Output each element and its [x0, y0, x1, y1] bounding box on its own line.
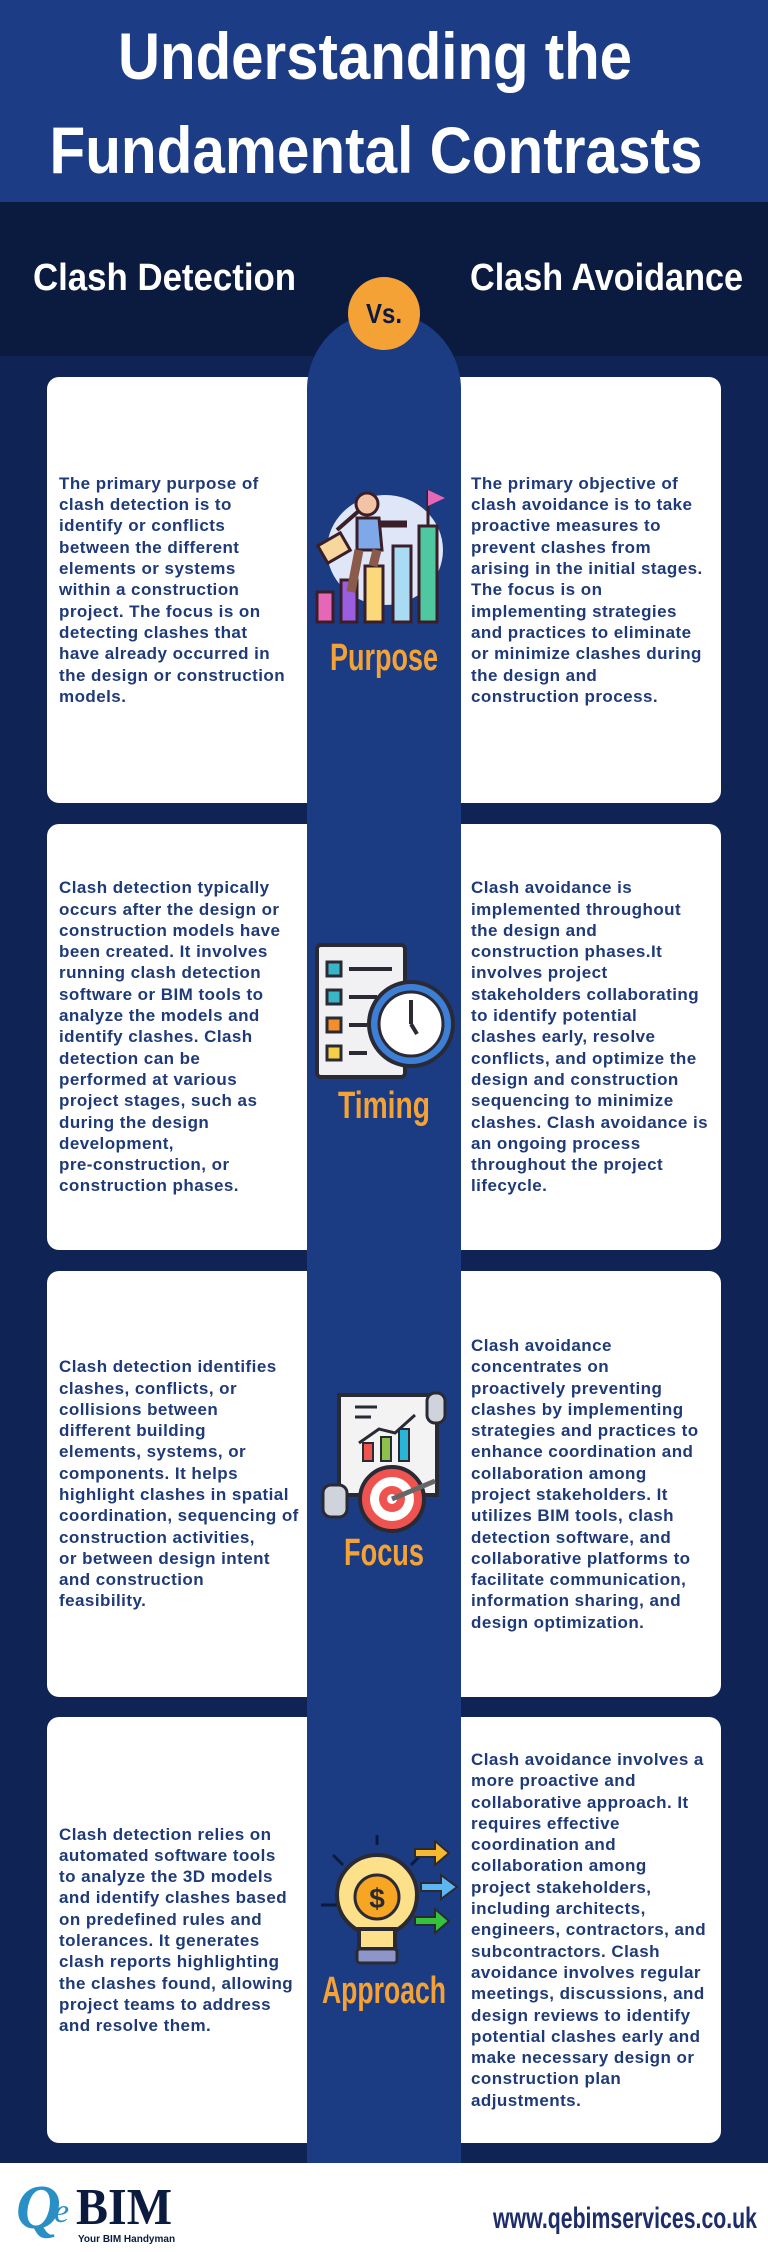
text: approach avoidance: more proactive and	[471, 1771, 636, 1790]
text: approach avoidance: engineers, contractors, and	[471, 1920, 706, 1939]
text: timing avoidance: an ongoing process	[471, 1134, 641, 1153]
vs badge: Vs.	[366, 298, 402, 328]
text: focus detection: construction activities,	[59, 1528, 255, 1547]
text: purpose avoidance: arising in the initial stages.	[471, 559, 703, 578]
text: purpose detection: the design or construction	[59, 666, 285, 685]
text: focus avoidance: strategies and practices to	[471, 1421, 699, 1440]
title	[50, 19, 702, 187]
text: focus avoidance: collaborative platforms to	[471, 1549, 691, 1568]
text: approach avoidance: avoidance involves regular	[471, 1963, 701, 1982]
icon: focus: Focus	[344, 1532, 424, 1574]
column headings	[33, 257, 743, 299]
text: focus detection: collisions between	[59, 1400, 218, 1419]
text: approach avoidance: Clash avoidance involves a	[471, 1750, 704, 1769]
text: purpose avoidance	[471, 474, 703, 706]
text: approach detection: Clash detection relies on	[59, 1825, 271, 1844]
text: purpose detection: identify or conflicts	[59, 516, 225, 535]
text: approach detection: clash reports highlighting	[59, 1952, 279, 1971]
text: focus detection: Clash detection identifies	[59, 1357, 277, 1376]
text: approach avoidance: collaboration among	[471, 1856, 647, 1875]
text: focus avoidance: information sharing, and	[471, 1591, 681, 1610]
text: timing detection: detection can be	[59, 1049, 200, 1068]
text: timing avoidance	[471, 878, 708, 1195]
text: focus detection: clashes, conflicts, or	[59, 1379, 237, 1398]
text: approach avoidance: construction plan	[471, 2069, 621, 2088]
text: timing avoidance: stakeholders collaborating	[471, 985, 699, 1004]
panel: purpose	[47, 377, 721, 803]
text: approach avoidance: coordination and	[471, 1835, 616, 1854]
text: focus avoidance: project stakeholders. It	[471, 1485, 668, 1504]
text: timing detection: analyze the models and	[59, 1006, 260, 1025]
text: purpose avoidance: prevent clashes from	[471, 538, 651, 557]
text: purpose detection: have already occurred in	[59, 644, 270, 663]
text: approach avoidance: including architects,	[471, 1899, 646, 1918]
text: timing detection: been created. It involves	[59, 942, 268, 961]
text: timing avoidance: the design and	[471, 921, 597, 940]
text: purpose avoidance: implementing strategies	[471, 602, 677, 621]
text: timing avoidance: lifecycle.	[471, 1176, 547, 1195]
text: timing detection: construction models have	[59, 921, 280, 940]
text: timing avoidance: conflicts, and optimize the	[471, 1049, 697, 1068]
text: timing avoidance: to identify potential	[471, 1006, 637, 1025]
title: Understanding the	[118, 19, 632, 93]
text: approach detection: and identify clashes based	[59, 1888, 287, 1907]
text: focus detection	[59, 1357, 299, 1610]
text: timing avoidance: sequencing to minimize	[471, 1091, 674, 1110]
text: timing detection: occurs after the design or	[59, 900, 279, 919]
text: focus avoidance: design optimization.	[471, 1613, 644, 1632]
text: purpose detection: models.	[59, 687, 126, 706]
text: timing avoidance: clashes early, resolve	[471, 1027, 655, 1046]
footer logo: Q	[16, 2174, 61, 2242]
text: purpose avoidance: proactive measures to	[471, 516, 661, 535]
text: approach avoidance: adjustments.	[471, 2091, 581, 2110]
text: purpose detection	[59, 474, 285, 706]
text: timing detection: pre-construction, or	[59, 1155, 230, 1174]
text: approach detection	[59, 1825, 293, 2035]
text: focus avoidance: detection software, and	[471, 1528, 671, 1547]
text: timing detection: project stages, such as	[59, 1091, 257, 1110]
text: purpose avoidance: construction process.	[471, 687, 658, 706]
text: approach avoidance: requires effective	[471, 1814, 620, 1833]
text: focus detection: or between design intent	[59, 1549, 270, 1568]
text: timing detection: Clash detection typically	[59, 878, 270, 897]
text: approach avoidance: make necessary design or	[471, 2048, 694, 2067]
text: focus detection: different building	[59, 1421, 206, 1440]
text: timing detection	[59, 878, 280, 1195]
text: purpose avoidance: clash avoidance is to take	[471, 495, 692, 514]
icon: purpose	[316, 490, 445, 679]
column headings: Clash Detection	[33, 257, 296, 299]
text: purpose detection: The primary purpose of	[59, 474, 259, 493]
text: purpose detection: between the different	[59, 538, 239, 557]
text: timing avoidance: involves project	[471, 963, 608, 982]
text: purpose avoidance: The primary objective of	[471, 474, 678, 493]
text: focus avoidance: facilitate communication,	[471, 1570, 686, 1589]
text: purpose detection: detecting clashes that	[59, 623, 247, 642]
text: timing detection: development,	[59, 1134, 174, 1153]
text: approach avoidance: design reviews to identify	[471, 2006, 691, 2025]
text: approach detection: to analyze the 3D models	[59, 1867, 273, 1886]
footer logo: BIM	[76, 2179, 172, 2236]
header band	[0, 202, 768, 356]
text: focus avoidance: collaboration among	[471, 1464, 647, 1483]
text: approach detection: on predefined rules and	[59, 1910, 262, 1929]
title band	[0, 0, 768, 202]
text: focus detection: components. It helps	[59, 1464, 238, 1483]
text: approach detection: tolerances. It generates	[59, 1931, 260, 1950]
text: focus detection: coordination, sequencing of	[59, 1506, 299, 1525]
icon: timing: Timing	[338, 1085, 430, 1127]
text: timing avoidance: throughout the project	[471, 1155, 663, 1174]
text: approach detection: project teams to address	[59, 1995, 271, 2014]
text: focus detection: highlight clashes in spatial	[59, 1485, 289, 1504]
footer logo: e	[54, 2193, 69, 2230]
text: approach detection: the clashes found, allowing	[59, 1974, 293, 1993]
text: approach avoidance: potential clashes early and	[471, 2027, 700, 2046]
text: approach avoidance: collaborative approach. It	[471, 1793, 689, 1812]
text: purpose avoidance: The focus is on	[471, 580, 602, 599]
text: focus detection: feasibility.	[59, 1591, 146, 1610]
text: timing avoidance: Clash avoidance is	[471, 878, 632, 897]
text: focus avoidance: concentrates on	[471, 1357, 609, 1376]
column headings: Clash Avoidance	[470, 257, 743, 299]
text: timing avoidance: implemented throughout	[471, 900, 681, 919]
text: approach avoidance: meetings, discussions, and	[471, 1984, 705, 2003]
text: approach detection: and resolve them.	[59, 2016, 211, 2035]
text: focus avoidance: enhance coordination and	[471, 1442, 693, 1461]
text: timing detection: software or BIM tools to	[59, 985, 263, 1004]
text: timing avoidance: construction phases.It	[471, 942, 662, 961]
text: approach avoidance: project stakeholders,	[471, 1878, 651, 1897]
text: timing detection: running clash detection	[59, 963, 261, 982]
footer logo	[16, 2174, 175, 2245]
text: focus avoidance: utilizes BIM tools, clash	[471, 1506, 674, 1525]
text: purpose avoidance: the design and	[471, 666, 597, 685]
text: timing detection: performed at various	[59, 1070, 237, 1089]
text: focus avoidance: Clash avoidance	[471, 1336, 612, 1355]
text: focus avoidance	[471, 1336, 699, 1632]
icon: approach	[321, 1835, 458, 2012]
icon: timing	[315, 943, 455, 1127]
text: timing detection: identify clashes. Clash	[59, 1027, 253, 1046]
text: focus detection: elements, systems, or	[59, 1442, 246, 1461]
center pillar	[307, 312, 461, 2163]
footer logo: Your BIM Handyman	[78, 2234, 175, 2245]
panel: timing	[47, 824, 721, 1250]
text: purpose avoidance: and practices to eliminate	[471, 623, 692, 642]
text: timing avoidance: design and construction	[471, 1070, 679, 1089]
panel: approach	[47, 1717, 721, 2143]
text: approach avoidance	[471, 1750, 706, 2110]
text: purpose detection: clash detection is to	[59, 495, 232, 514]
text: purpose detection: elements or systems	[59, 559, 236, 578]
vs badge	[348, 277, 420, 350]
text: timing detection: during the design	[59, 1113, 209, 1132]
icon: approach: $	[369, 1883, 385, 1914]
text: timing detection: construction phases.	[59, 1176, 239, 1195]
text: purpose detection: project. The focus is on	[59, 602, 261, 621]
text: purpose avoidance: or minimize clashes during	[471, 644, 702, 663]
panel: focus	[47, 1271, 721, 1697]
title: Fundamental Contrasts	[50, 113, 702, 187]
text: focus detection: and construction	[59, 1570, 204, 1589]
icon: focus	[322, 1392, 446, 1574]
text: approach detection: automated software tools	[59, 1846, 276, 1865]
text: purpose detection: within a construction	[59, 580, 239, 599]
text: approach avoidance: subcontractors. Clash	[471, 1942, 660, 1961]
text: focus avoidance: proactively preventing	[471, 1379, 662, 1398]
text: focus avoidance: clashes by implementing	[471, 1400, 684, 1419]
text: timing avoidance: clashes. Clash avoidance is	[471, 1113, 708, 1132]
